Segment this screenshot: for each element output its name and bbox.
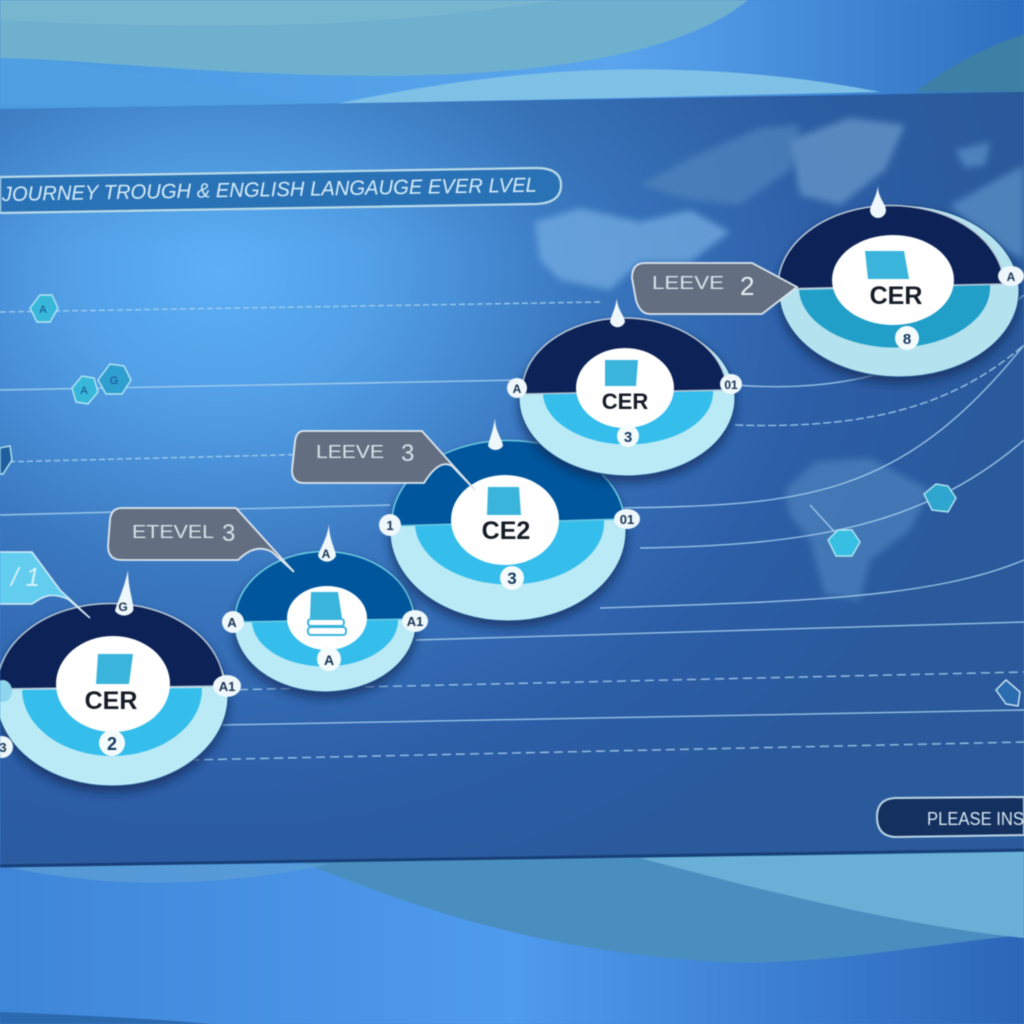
label: CE2: CE2 [482, 517, 530, 545]
world map [535, 118, 1024, 600]
step 1 callout: / 1 [9, 562, 40, 592]
badge number: 2 [107, 734, 117, 754]
label: CER: CER [85, 687, 137, 715]
route lines [0, 295, 1024, 760]
badge number: 3 [507, 569, 517, 588]
step 3 badges: 1 [386, 518, 394, 533]
step 5 callout [632, 263, 797, 314]
icon: document [865, 251, 909, 279]
node icons: A [80, 385, 88, 397]
step 2 badges [222, 524, 428, 633]
step 5 circle [778, 205, 1019, 377]
step 1 callout [0, 552, 90, 618]
badge number: 8 [903, 331, 911, 348]
step 2 callout: ETEVEL [132, 522, 214, 542]
label: CER: CER [602, 389, 648, 414]
badge number: 3 [624, 429, 632, 446]
main panel [0, 92, 1024, 866]
step 4 badges: 01 [724, 378, 738, 392]
step 3 circle [390, 440, 626, 621]
step 1 badges: G [118, 600, 128, 614]
step 5 badges: A [1007, 270, 1016, 284]
step 2 badges: A [322, 547, 331, 561]
step 2 callout: 3 [222, 520, 235, 547]
title text: JOURNEY TROUGH & ENGLISH LANGAUGE EVER LVEL [1, 174, 537, 206]
icon: book [308, 592, 346, 635]
step 1 badges: A1 [219, 679, 235, 694]
step 3 callout [292, 431, 475, 490]
icon: document [605, 360, 638, 386]
node icons: G [110, 375, 118, 387]
step 2 badges: A1 [407, 614, 423, 629]
step 4 badges [507, 298, 742, 398]
step 5 callout: LEEVE [652, 273, 724, 293]
badge letter: A [324, 652, 334, 668]
step 4 circle [519, 318, 735, 476]
please button [877, 797, 1024, 837]
step 3 badges [379, 418, 640, 536]
step 1 badges [0, 570, 241, 758]
step 5 badges [870, 186, 1024, 286]
node icons: A [39, 304, 47, 316]
step 3 callout: 3 [401, 440, 414, 467]
icon: document [96, 654, 133, 684]
step 3 badges: 01 [620, 512, 634, 527]
icon: document [487, 487, 521, 515]
title banner [0, 168, 561, 213]
node icons [0, 295, 1020, 706]
step 1 circle [0, 603, 228, 786]
step 3 callout: LEEVE [316, 442, 384, 462]
step 5 callout: 2 [740, 271, 754, 301]
step 2 badges: A [227, 615, 237, 630]
label: CER: CER [870, 282, 922, 310]
step 4 badges: A [513, 382, 522, 396]
step 2 circle [234, 551, 416, 692]
step 2 callout [108, 508, 294, 572]
